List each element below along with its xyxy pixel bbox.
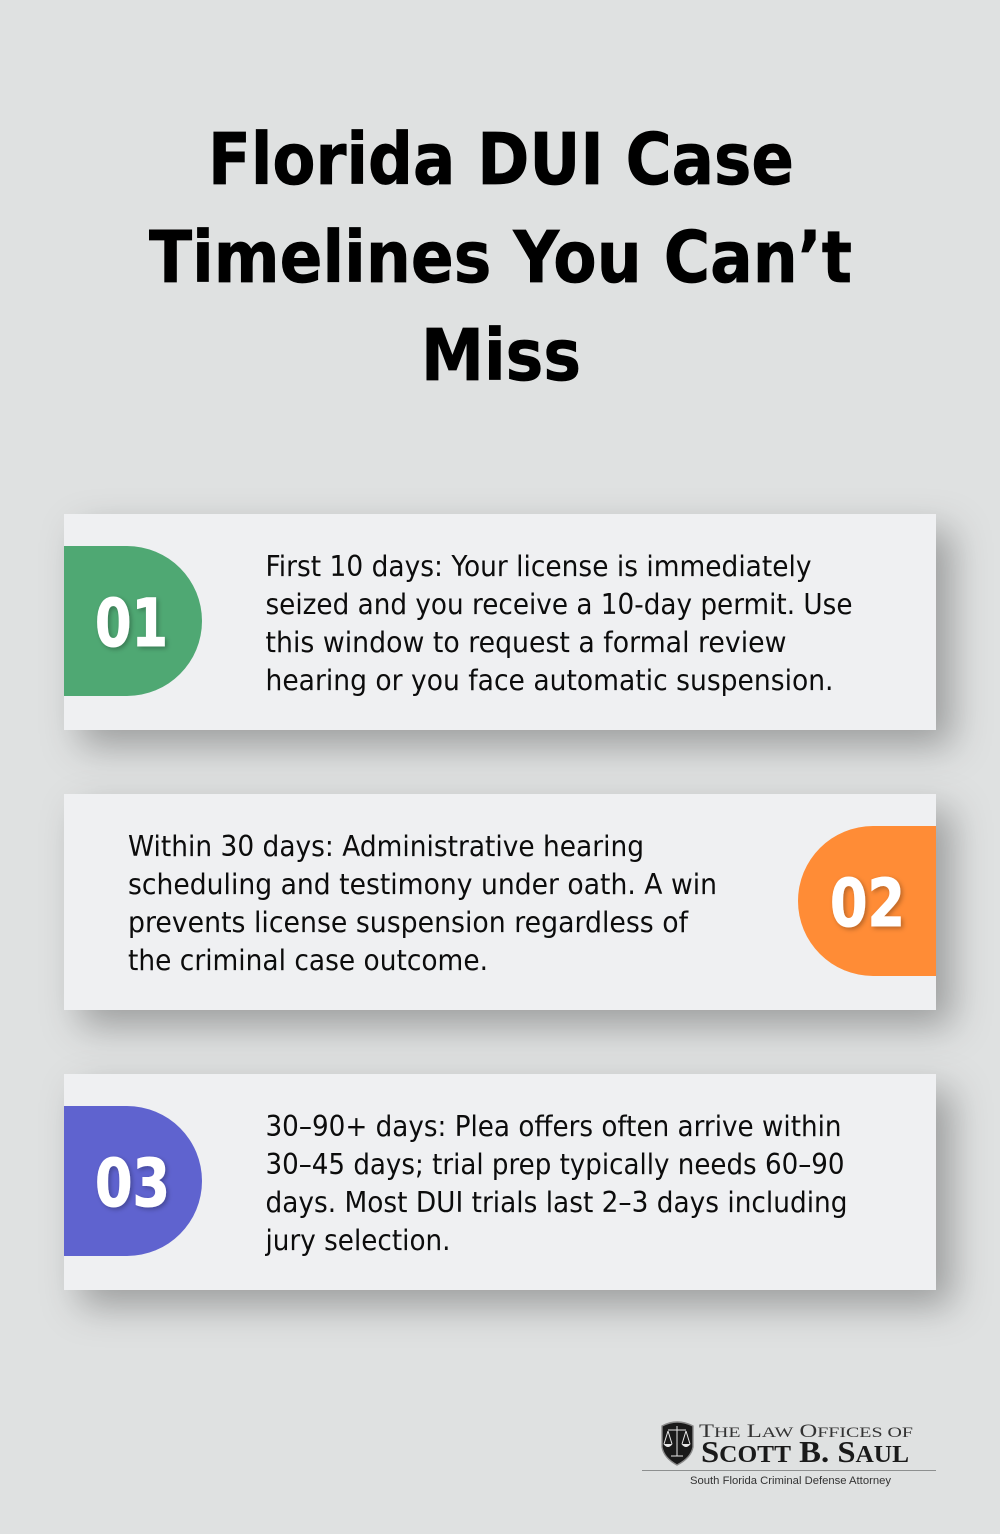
icon: shield with scales: [662, 1422, 693, 1465]
text block 03: jury selection.: [265, 1224, 450, 1257]
logo: The Law Offices of Scott B. Saul: [642, 1422, 936, 1487]
text block 02: prevents license suspension regardless of: [128, 906, 689, 939]
badge 03: 03: [95, 1145, 170, 1222]
panel: step 03: [64, 1074, 936, 1290]
text block 01: this window to request a formal review: [266, 626, 786, 659]
badge 02: [798, 826, 936, 976]
text block 02: [128, 830, 717, 977]
text block 03: days. Most DUI trials last 2–3 days including: [266, 1186, 848, 1219]
logo name: THE L AW O FFICES OF: [699, 1422, 913, 1442]
text block 01: First 10 days: Your license is immediately: [266, 550, 812, 583]
title: Miss: [421, 314, 581, 397]
badge 01: 01: [95, 585, 168, 662]
text block 01: [266, 550, 852, 697]
badge 01: [64, 546, 202, 696]
panel: step 01: [64, 514, 936, 730]
text block 03: [265, 1110, 848, 1257]
logo divider: [642, 1470, 936, 1471]
badge 02: 02: [830, 865, 905, 942]
text block 03: 30–90+ days: Plea offers often arrive within: [266, 1110, 842, 1143]
title: Florida DUI Case: [208, 118, 794, 201]
logo tagline: South Florida Criminal Defense Attorney: [690, 1475, 892, 1487]
card background 03: [64, 1074, 936, 1290]
text block 01: hearing or you face automatic suspension.: [266, 664, 834, 697]
title: [149, 118, 852, 397]
text block 02: Within 30 days: Administrative hearing: [128, 830, 644, 863]
badge 03: [64, 1106, 202, 1256]
title: Timelines You Can’t: [149, 216, 852, 299]
card background 01: [64, 514, 936, 730]
text block 03: 30–45 days; trial prep typically needs 60–90: [266, 1148, 844, 1181]
panel: step 02: [64, 794, 936, 1010]
logo name: SCOTT B. SAUL: [701, 1434, 909, 1469]
card background 02: [64, 794, 936, 1010]
text block 02: the criminal case outcome.: [128, 944, 488, 977]
text block 02: scheduling and testimony under oath. A win: [128, 868, 717, 901]
text block 01: seized and you receive a 10-day permit. Use: [266, 588, 852, 621]
